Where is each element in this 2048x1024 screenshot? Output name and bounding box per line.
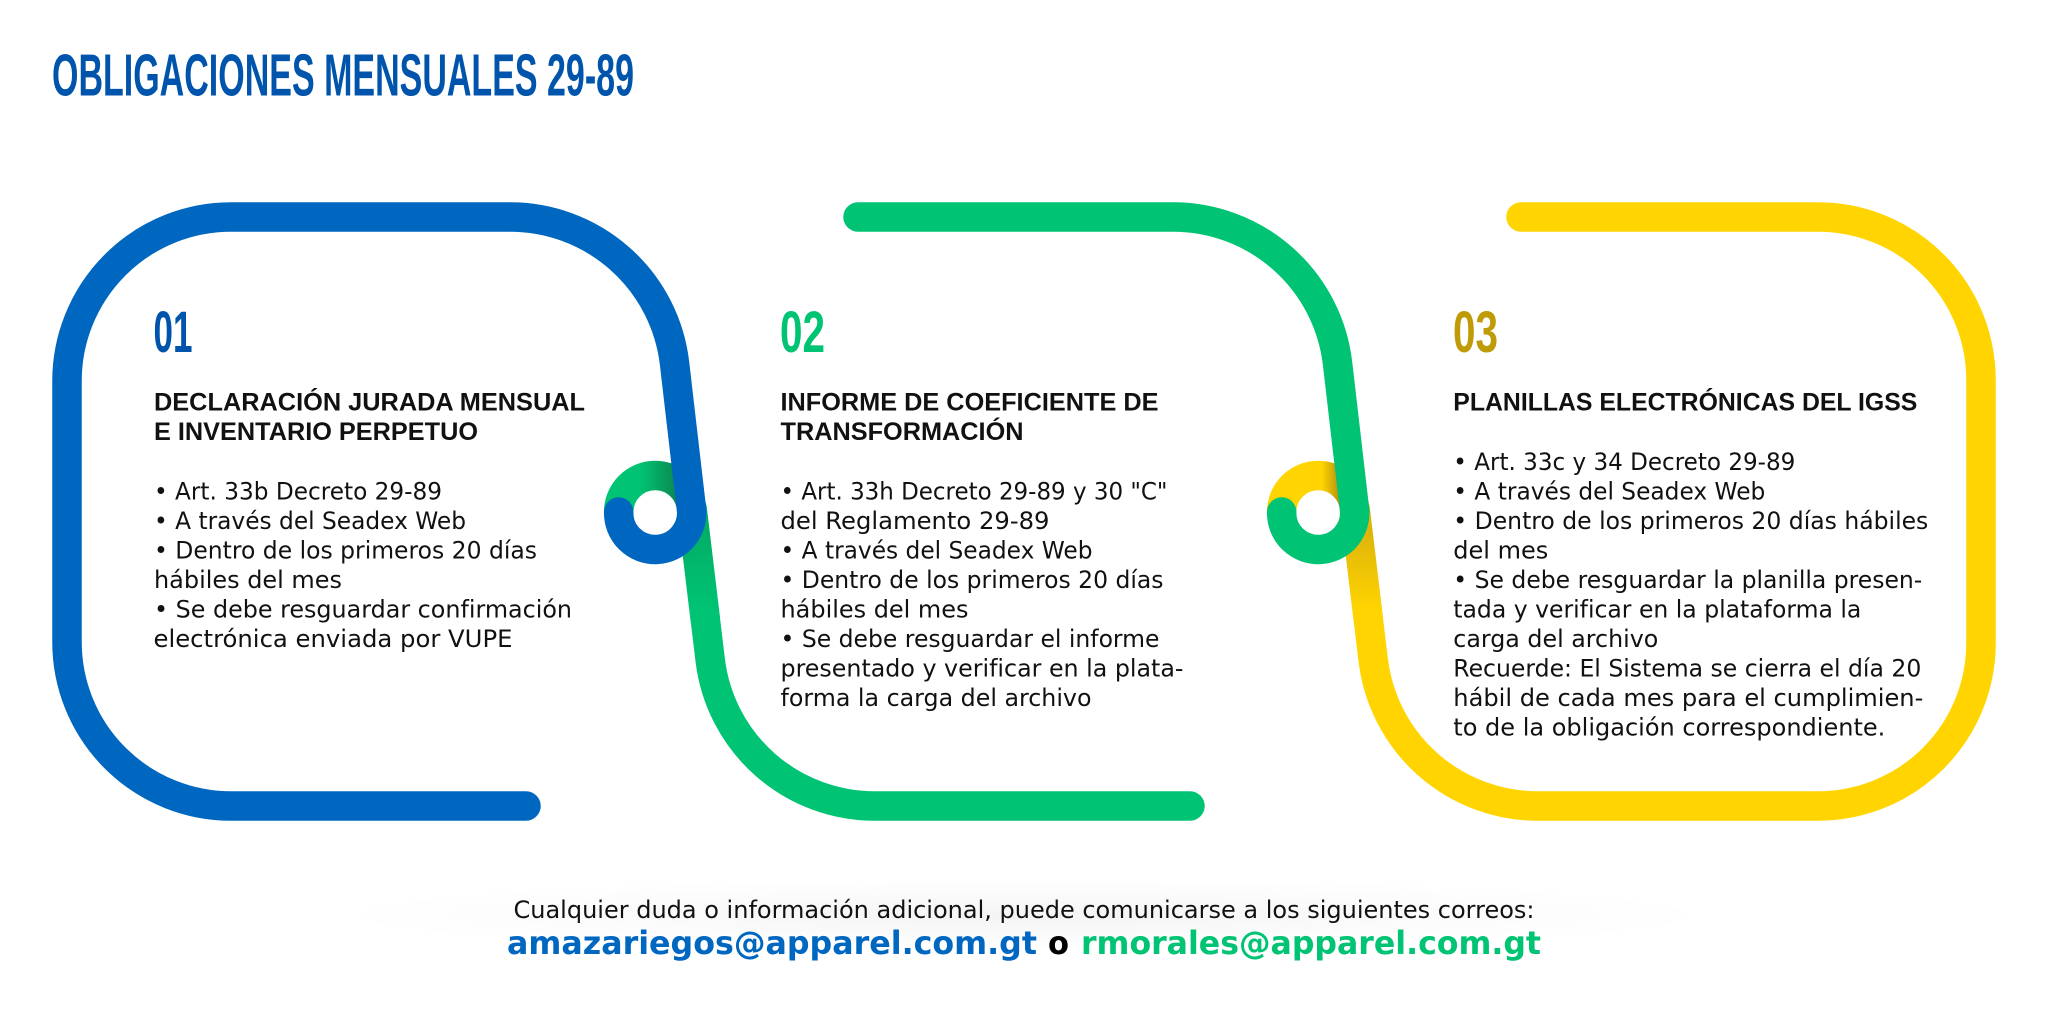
body 3: del mes xyxy=(1453,536,1548,564)
body 3: • A través del Seadex Web xyxy=(1453,478,1765,506)
number 03: 03 xyxy=(1453,300,1498,365)
number 01: 01 xyxy=(154,300,192,365)
footer contact xyxy=(324,877,1724,962)
body 3: • Dentro de los primeros 20 días hábiles xyxy=(1453,507,1928,535)
body 1: • Se debe resguardar confirmación xyxy=(154,595,572,623)
body 1: electrónica enviada por VUPE xyxy=(154,625,512,653)
body 1: hábiles del mes xyxy=(154,566,342,594)
blue ribbon: panel 1 frame xyxy=(67,217,692,806)
body 2: presentado y verificar en la plata- xyxy=(780,654,1184,682)
footer note: Cualquier duda o información adicional, puede comunicarse a los siguientes correos: xyxy=(514,896,1534,924)
body 2: • A través del Seadex Web xyxy=(780,536,1092,564)
panel 1 text xyxy=(154,300,585,653)
body 3: carga del archivo xyxy=(1453,625,1658,653)
heading 1: DECLARACIÓN JURADA MENSUAL xyxy=(154,387,585,417)
body 2: • Art. 33h Decreto 29-89 y 30 "C" xyxy=(780,477,1168,505)
email green: rmorales@apparel.com.gt xyxy=(1081,924,1541,962)
body 2: • Se debe resguardar el informe xyxy=(780,625,1160,653)
body 1: • A través del Seadex Web xyxy=(154,507,466,535)
body 1: • Art. 33b Decreto 29-89 xyxy=(154,477,442,505)
heading 2: INFORME DE COEFICIENTE DE xyxy=(780,389,1158,417)
heading 3: PLANILLAS ELECTRÓNICAS DEL IGSS xyxy=(1453,387,1917,417)
body 3: tada y verificar en la plataforma la xyxy=(1453,596,1861,624)
connector o: o xyxy=(1048,924,1069,962)
heading 2: TRANSFORMACIÓN xyxy=(780,416,1024,446)
body 2: forma la carga del archivo xyxy=(780,684,1092,712)
number 02: 02 xyxy=(780,300,825,365)
body 3: Recuerde: El Sistema se cierra el día 20 xyxy=(1453,654,1921,682)
title: OBLIGACIONES MENSUALES 29-89 xyxy=(52,42,634,108)
body 3: hábil de cada mes para el cumplimien- xyxy=(1453,684,1923,712)
body 3 xyxy=(1453,448,1928,742)
body 1: • Dentro de los primeros 20 días xyxy=(154,536,537,564)
body 3: • Se debe resguardar la planilla presen- xyxy=(1453,566,1922,594)
body 2 xyxy=(780,477,1184,712)
heading 1: E INVENTARIO PERPETUO xyxy=(154,418,478,446)
body 2: del Reglamento 29-89 xyxy=(780,507,1050,535)
panel 3 text xyxy=(1453,300,1928,742)
body 2: hábiles del mes xyxy=(780,595,968,623)
panel 2 text xyxy=(780,300,1184,712)
body 3: • Art. 33c y 34 Decreto 29-89 xyxy=(1453,448,1795,476)
heading 1 xyxy=(154,387,585,446)
body 2: • Dentro de los primeros 20 días xyxy=(780,566,1164,594)
email blue: amazariegos@apparel.com.gt xyxy=(507,924,1037,962)
heading 2 xyxy=(780,389,1158,446)
yellow ribbon: panel 3 frame xyxy=(1282,217,1981,806)
green ribbon: panel 2 frame xyxy=(619,217,1355,806)
body 1 xyxy=(154,477,572,653)
body 3: to de la obligación correspondiente. xyxy=(1453,714,1885,742)
